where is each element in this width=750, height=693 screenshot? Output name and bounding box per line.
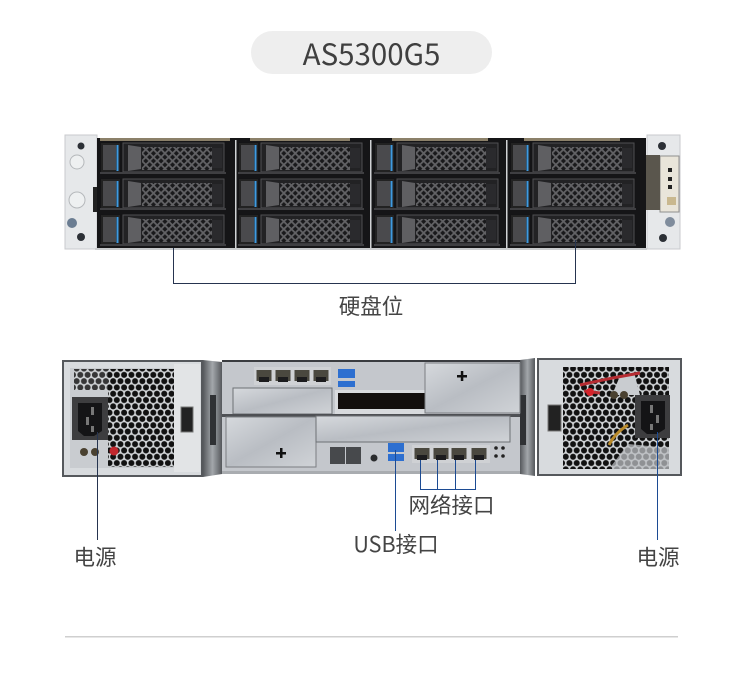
label: network ports: 网络接口	[408, 489, 494, 520]
callout line: drive bays	[174, 240, 576, 284]
callout line: right power	[656, 432, 658, 540]
rear view: center controller modules	[222, 360, 520, 474]
label: usb ports: USB接口	[353, 528, 439, 559]
bay dividers	[235, 140, 508, 248]
bottom rj45 ports	[412, 445, 490, 463]
icon: handle	[548, 405, 561, 431]
icon: power inlet	[635, 395, 670, 438]
lower left blank plate	[226, 417, 316, 467]
vent holes	[494, 446, 505, 458]
icon: handle	[181, 407, 193, 432]
rear view: right power supply	[537, 358, 682, 476]
callout line: usb	[394, 450, 396, 531]
icon: power inlet	[72, 397, 108, 440]
qsfp ports	[330, 447, 361, 464]
title pill	[251, 31, 492, 74]
top usb ports	[338, 369, 355, 387]
rear view: left power supply	[62, 360, 203, 477]
label: left power: 电源	[73, 541, 116, 572]
front view: server chassis	[65, 135, 680, 250]
upper right blank plate	[425, 363, 520, 413]
label: drive bays: 硬盘位	[339, 290, 403, 321]
bottom usb ports	[388, 443, 404, 461]
right mounting ear	[646, 135, 680, 249]
callout line: left power	[96, 432, 98, 540]
title text: AS5300G5	[303, 32, 440, 74]
lower expansion plate	[316, 416, 510, 442]
callout bracket: network ports	[420, 460, 476, 490]
black open slot	[335, 390, 426, 414]
divider	[65, 636, 678, 638]
top expansion plate	[233, 388, 332, 414]
left mounting ear	[65, 135, 97, 249]
rear view: hinges	[203, 358, 535, 477]
top rj45 ports	[254, 367, 331, 385]
drive bays	[100, 142, 636, 246]
label: right power: 电源	[636, 541, 680, 572]
